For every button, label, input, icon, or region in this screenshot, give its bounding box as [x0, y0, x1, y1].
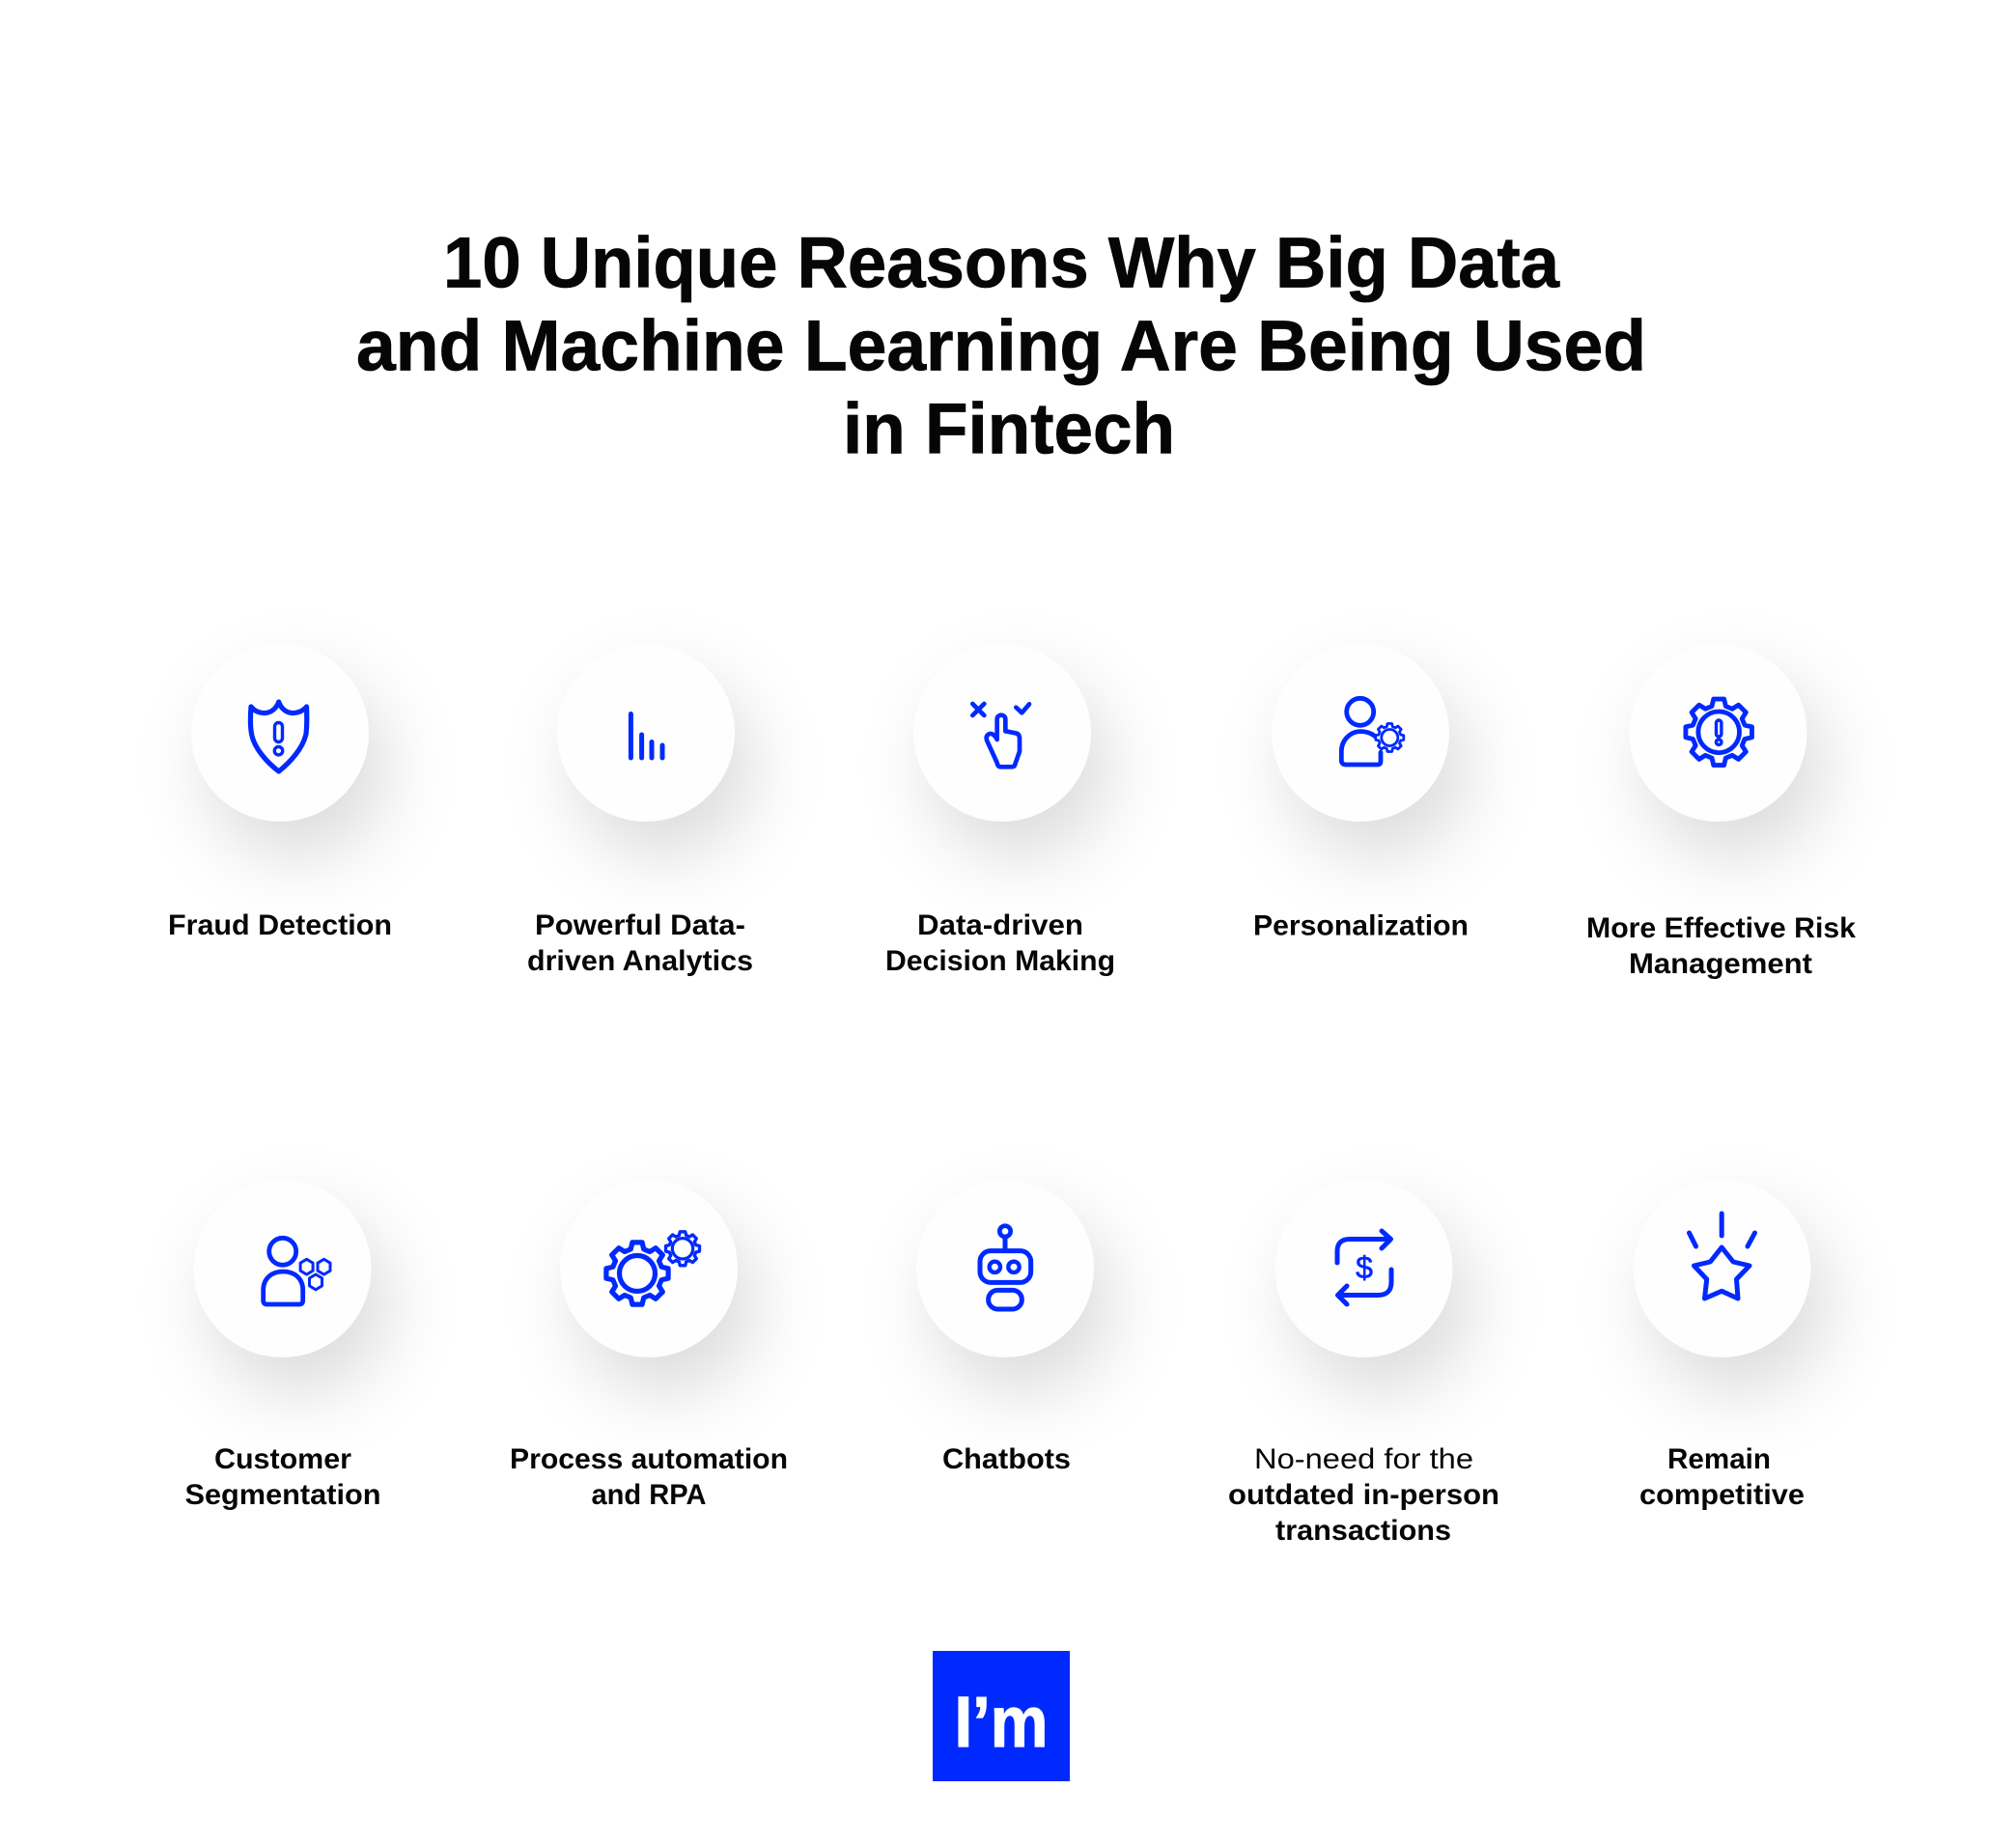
label: fraud detection: Fraud Detection — [168, 909, 392, 941]
icon circle: customer segmentation — [193, 1180, 388, 1392]
title — [356, 222, 1646, 469]
label: no-need for outdated in-person transactions: transactions — [1275, 1515, 1451, 1547]
label: customer segmentation — [185, 1443, 380, 1511]
icon: star with rays — [1690, 1214, 1755, 1299]
title: 10 Unique Reasons Why Big Data — [443, 222, 1560, 303]
label: data-driven decision making: Data-driven — [917, 909, 1083, 941]
label: remain competitive: Remain — [1667, 1443, 1771, 1475]
icon: dollar exchange arrows — [1337, 1231, 1391, 1304]
panel: fraud detection — [168, 644, 392, 941]
label: process automation and rpa: Process automation — [510, 1443, 788, 1475]
icon: two gears — [606, 1232, 699, 1304]
label: more effective risk management: More Effective Risk — [1586, 912, 1857, 944]
icon: person with hexagons — [264, 1238, 330, 1304]
icon: person with gear — [1341, 698, 1404, 765]
label: no-need for outdated in-person transactions: outdated in-person — [1228, 1479, 1499, 1511]
title: and Machine Learning Are Being Used — [356, 305, 1646, 386]
panel: process automation and rpa — [510, 1180, 788, 1511]
icon circle: chatbots — [916, 1180, 1111, 1392]
label: process automation and rpa — [510, 1443, 788, 1511]
icon circle: remain competitive — [1634, 1180, 1828, 1392]
label: customer segmentation: Customer — [214, 1443, 352, 1475]
icon: robot — [980, 1226, 1031, 1309]
label: process automation and rpa: and RPA — [591, 1479, 707, 1511]
label: more effective risk management — [1586, 912, 1857, 980]
label: customer segmentation: Segmentation — [185, 1479, 380, 1511]
icon: hand with cross and check — [972, 704, 1029, 767]
panel: customer segmentation — [185, 1180, 388, 1511]
label: no-need for outdated in-person transactions: No-need for the — [1254, 1443, 1473, 1475]
panel: no-need for outdated in-person transactions — [1228, 1180, 1499, 1547]
label: no-need for outdated in-person transactions — [1228, 1443, 1499, 1547]
panel: chatbots — [916, 1180, 1111, 1475]
icon circle: analytics — [557, 644, 752, 856]
icon circle: transactions — [1274, 1180, 1470, 1392]
icon circle: fraud detection — [191, 644, 386, 856]
panel: data-driven decision making — [885, 644, 1115, 977]
panel: powerful data-driven analytics — [527, 644, 753, 977]
label: remain competitive: competitive — [1639, 1479, 1805, 1511]
panel: more effective risk management — [1586, 644, 1857, 980]
label: personalization: Personalization — [1253, 909, 1469, 942]
icon: bar chart — [630, 714, 662, 758]
label: data-driven decision making: Decision Making — [885, 945, 1115, 977]
panel: personalization — [1253, 644, 1469, 942]
icon circle: process automation — [560, 1180, 755, 1392]
label: more effective risk management: Management — [1629, 948, 1812, 980]
icon circle: risk management — [1630, 644, 1824, 856]
icon circle: personalization — [1272, 644, 1467, 856]
label: remain competitive — [1639, 1443, 1805, 1511]
label: powerful data-driven analytics: Powerful Data- — [535, 909, 745, 941]
label: powerful data-driven analytics — [527, 909, 753, 977]
logo — [933, 1651, 1070, 1781]
label: powerful data-driven analytics: driven Analytics — [527, 945, 753, 977]
icon: shield with exclamation — [250, 702, 307, 771]
title: in Fintech — [843, 388, 1175, 469]
icon circle: decision making — [913, 644, 1108, 856]
panel: remain competitive — [1634, 1180, 1828, 1511]
label: data-driven decision making — [885, 909, 1115, 977]
icon: gear with exclamation — [1686, 699, 1751, 766]
icon: dollar exchange arrows: $ — [1356, 1250, 1373, 1285]
logo: I’m — [954, 1682, 1049, 1762]
label: chatbots: Chatbots — [942, 1443, 1071, 1475]
